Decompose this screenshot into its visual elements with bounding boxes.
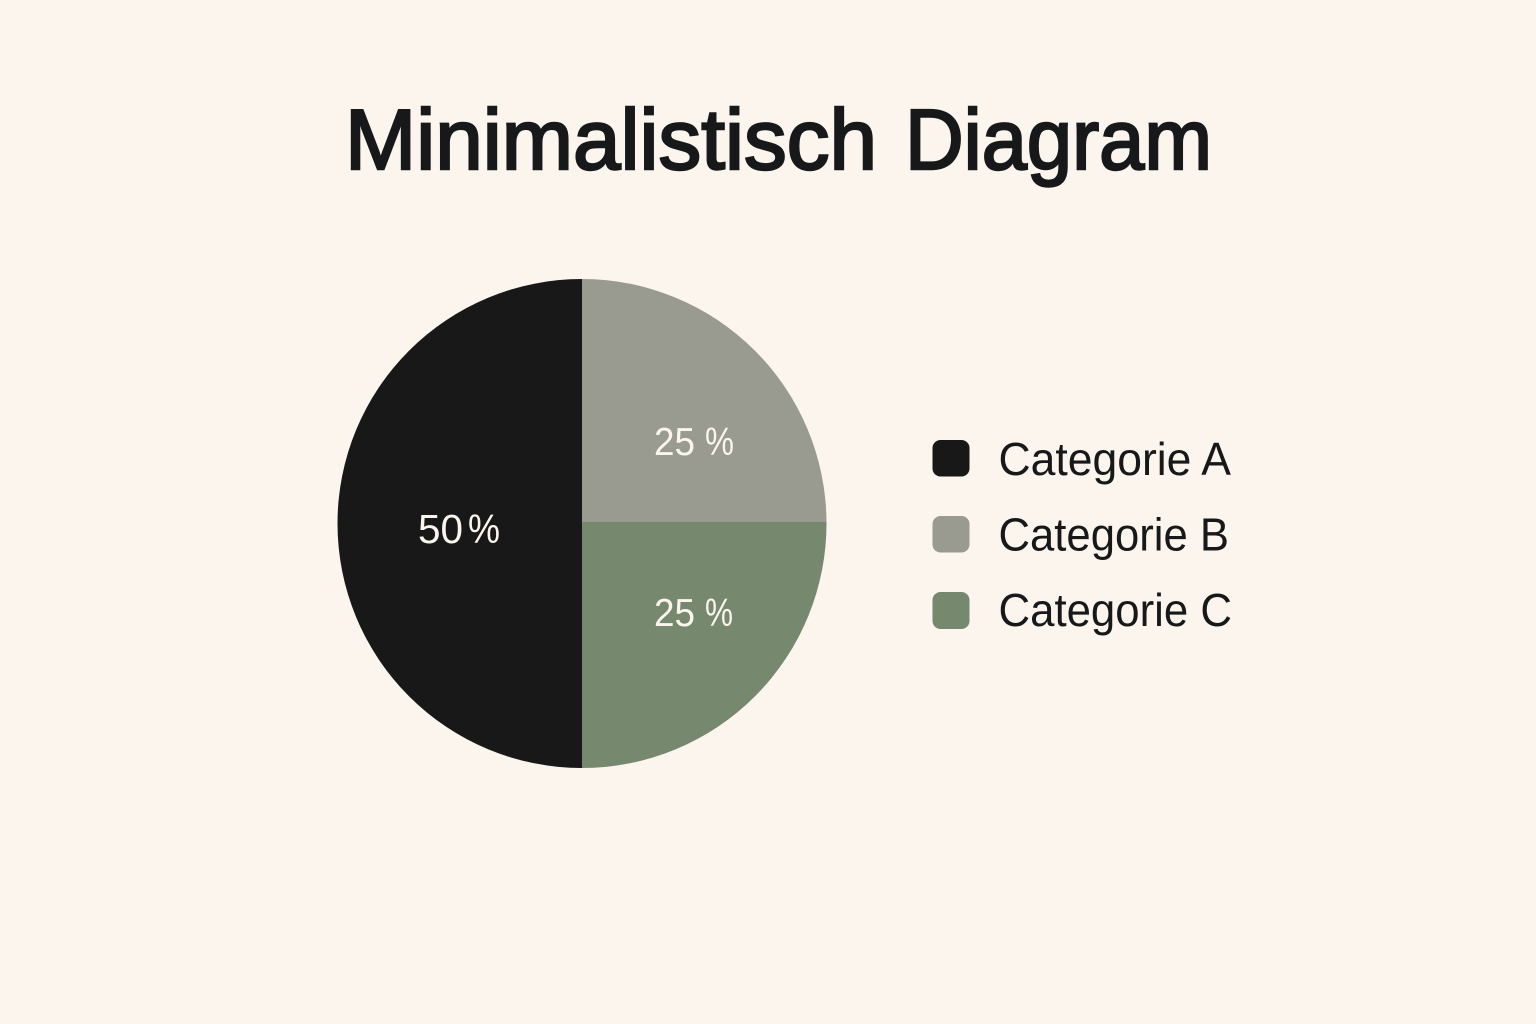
legend item: Categorie B: Categorie B (998, 508, 1229, 560)
slice: Categorie A 50% (337, 279, 582, 768)
label: 25% top: % (705, 421, 734, 464)
slice: Categorie C 25% (582, 522, 827, 768)
label: 50%: % (468, 506, 500, 552)
title: Minimalistisch (345, 93, 877, 188)
label: 50%: 50 (418, 506, 463, 552)
label: 25% bottom: 25 (654, 592, 695, 635)
label: 25% top: 25 (654, 421, 695, 464)
title: Diagram (905, 93, 1212, 188)
pie chart (337, 279, 827, 768)
legend item: Categorie C: Categorie C (998, 584, 1232, 636)
label: 25% bottom: % (705, 592, 733, 635)
legend item: Categorie A: Categorie A (998, 433, 1231, 485)
legend (932, 433, 1232, 636)
slice: Categorie B 25% (582, 279, 826, 522)
